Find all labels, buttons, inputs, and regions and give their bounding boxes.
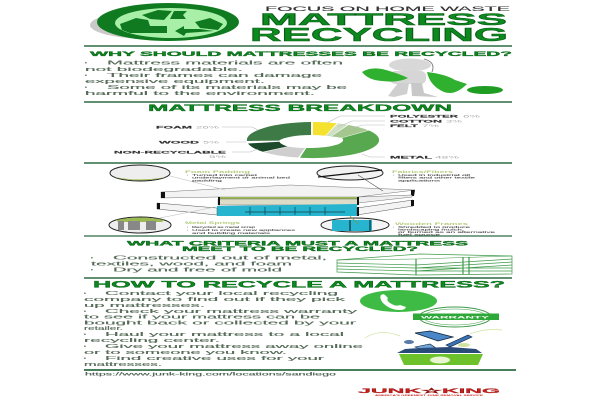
text block: how to recycle: • [84,356,86,362]
text block: why recycle: Their frames can damage [107,73,322,79]
text block: how to recycle: company to find out if they pick [84,297,346,303]
chart labels: METAL [390,156,434,160]
callout: wooden frames: or burned as an alternative [398,231,497,234]
heading: mattress breakdown: MATTRESS BREAKDOWN [148,103,452,113]
chart labels: WOOD [159,140,200,144]
callout: wooden frames: • [393,226,394,229]
callout: fabrics and fibers [317,166,477,191]
text block: criteria: • [91,256,93,262]
callout: fabrics and fibers: filters and other textile [398,177,477,180]
text block: how to recycle: retailer. [84,326,123,332]
text block: how to recycle: recycling center. [84,338,220,344]
donut chart [247,122,379,158]
heading: why recycle: WHY SHOULD MATTRESSES BE RECYCLED? [90,51,512,58]
logo: junk king: JUNK☆KING [358,387,500,395]
text block: how to recycle: or to someone you know. [84,350,287,356]
text block: criteria: textiles, wood, and foam [91,262,292,268]
callout: metal springs: Recycled as metal scrap [192,226,256,229]
title [250,6,512,45]
icon: person holding leaf [362,58,503,97]
callout: wooden frames: Wooden Frames [395,222,468,226]
callout: foam padding: • [187,174,188,177]
title: FOCUS ON HOME WASTE [265,6,512,13]
text block: how to recycle: • [84,332,86,338]
chart labels: 6% [463,114,482,118]
mattress layers diagram [157,185,415,216]
text block: criteria: • [91,268,93,274]
chart labels: 26% [196,126,221,130]
title: MATTRESS [260,11,507,29]
title: RECYCLING [250,25,508,45]
chart labels: 48% [435,156,461,160]
heading: criteria: MEET TO BE RECYCLED? [182,246,419,253]
text block: why recycle: Some of its materials may be [107,85,347,91]
text block: criteria: Dry and free of mold [113,268,282,274]
text block: how to recycle: mattresses. [84,362,162,368]
callout: metal springs: • [187,229,188,232]
text block: how to recycle [84,291,363,368]
text block: how to recycle: Find creative uses for your [105,356,325,362]
text block: how to recycle: to see if your mattress can be [84,315,320,321]
text block: why recycle: not biodegradable. [85,67,243,73]
text block: why recycle: Mattress materials are often [107,60,343,66]
chart labels: NON-RECYCLABLE [114,150,227,154]
chart labels: 5% [203,140,221,144]
callout: metal springs: and building materials [192,232,272,235]
text block: how to recycle: bought back or collected by your [84,320,357,326]
chart labels: COTTON [390,119,443,123]
text block: how to recycle: Haul your mattress to a local [105,332,344,338]
chart labels: 7% [422,124,441,128]
text block: how to recycle: Check your mattress warranty [105,309,358,315]
callout: metal springs: Used to create new appliances [192,229,297,232]
text block: criteria: Constructed out of metal, [113,256,327,262]
callout: wooden frames [321,216,497,236]
callout: metal springs: • [187,226,188,229]
callout: wooden frames: Shredded to produce [398,226,472,229]
heading: how to recycle: HOW TO RECYCLE A MATTRESS? [93,280,505,290]
callout: fabrics and fibers: Fabrics/Fibers [392,170,453,174]
callout: fabrics and fibers: applications [398,179,442,182]
chart labels: FELT [390,124,420,128]
icon: mattress outline [337,254,512,275]
callout: fabrics and fibers: • [393,174,394,177]
callout: foam padding: underlayment or animal bed [192,177,292,180]
chart labels: 3% [446,119,464,123]
callout: fabrics and fibers: Used in industrial oil [398,174,471,177]
logo: junk king [358,387,500,397]
text block: how to recycle: up mattresses. [84,303,205,309]
text block: how to recycle: • [84,291,86,297]
source url: https://www.junk-king.com/locations/sandiego [85,372,338,376]
heading: criteria [127,240,468,253]
callout: foam padding [110,165,292,190]
callout: metal springs [109,207,297,235]
callout: wooden frames: fuel source [398,233,442,236]
text block: why recycle [85,60,347,97]
chart labels: FOAM [156,126,192,130]
icon: recycling bin with junk [365,330,502,365]
callout: foam padding: padding [192,179,224,182]
callout: wooden frames: landscaping mulch, [398,229,465,232]
icon: phone [360,290,437,312]
text block: how to recycle: Give your mattress away online [105,344,363,350]
text block: why recycle: expensive equipment. [85,79,265,85]
callout: metal springs: Metal Springs [185,221,240,225]
text block: how to recycle: Contact your local recycling [105,291,338,297]
callout: foam padding: Turned into carpet [192,174,258,177]
text block: why recycle: • [85,73,87,79]
icon: recycling logo [90,3,239,41]
chart labels: POLYESTER [390,114,459,118]
chart labels: 5% [209,155,228,159]
logo: junk king: AMERICA'S GREENEST JUNK REMOVAL SERVICE [375,394,484,397]
text block: why recycle: • [85,85,87,91]
text block: why recycle: harmful to the environment. [85,91,315,97]
text block: why recycle: • [85,60,87,66]
text block: how to recycle: • [84,344,86,350]
text block: criteria [91,256,327,274]
heading: criteria: WHAT CRITERIA MUST A MATTRESS [127,240,468,248]
callout: foam padding: Foam Padding [185,170,250,174]
icon: warranty badge: WARRANTY [421,315,490,320]
chart labels [114,114,482,160]
text block: how to recycle: • [84,309,86,315]
icon: warranty badge [413,307,499,327]
